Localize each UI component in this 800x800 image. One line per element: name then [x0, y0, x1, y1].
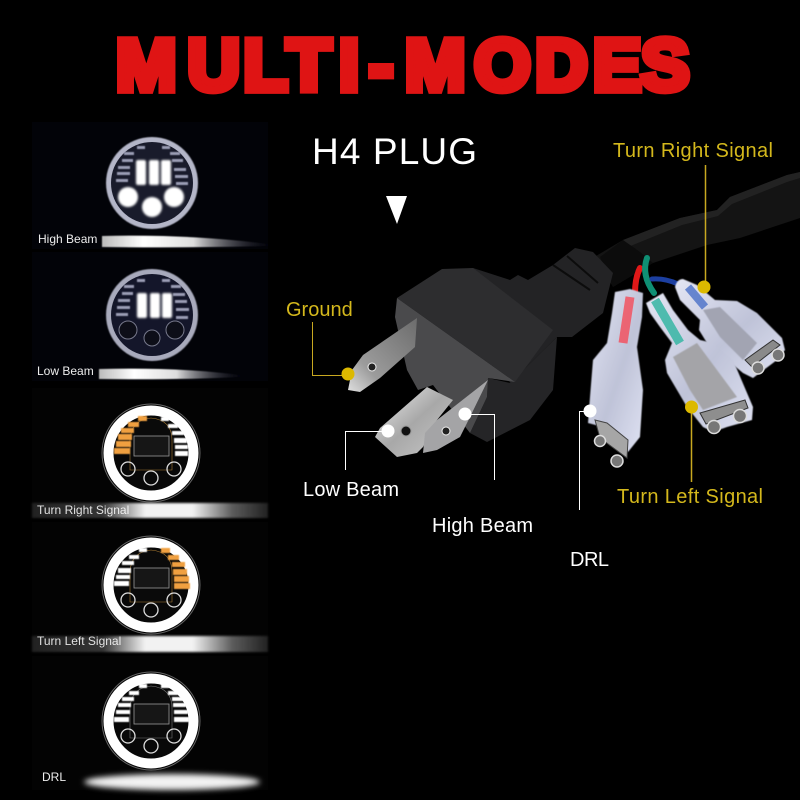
- panel: DRL: [32, 656, 268, 790]
- heading: H4 plug: H4 PLUG: [312, 131, 477, 172]
- panel: low beam: [32, 252, 268, 381]
- callout: high beam: [432, 408, 533, 537]
- light band: [32, 636, 268, 652]
- panel: turn right signal: [32, 388, 268, 518]
- title: MULTI-MODES: [116, 25, 689, 106]
- lamp: [102, 536, 200, 634]
- callout: low beam: Low Beam: [303, 479, 399, 501]
- high beam prong: [423, 380, 488, 453]
- light band: [32, 503, 268, 518]
- connector: turn right (blue): [675, 279, 785, 378]
- label: Turn Right Signal: [37, 503, 129, 517]
- panel: high beam: [32, 122, 268, 249]
- callout: ground: [286, 299, 354, 380]
- arrow: down triangle: [386, 196, 407, 224]
- lamp: [102, 404, 200, 502]
- plug: [348, 248, 613, 457]
- callout: DRL: DRL: [570, 549, 609, 571]
- front face: [395, 298, 515, 433]
- terminal tubes: [594, 436, 623, 467]
- connector: turn left (green): [646, 293, 753, 434]
- callout: turn right signal: [613, 140, 773, 294]
- label: DRL: [42, 770, 66, 784]
- light band: [102, 236, 268, 247]
- callout: turn left signal: [617, 400, 763, 508]
- light band: [99, 369, 240, 379]
- connector: DRL (red): [588, 289, 643, 467]
- top face: [397, 268, 553, 382]
- lamp: [102, 672, 200, 770]
- callout: turn left signal: Turn Left Signal: [617, 486, 763, 508]
- light band: [84, 774, 260, 790]
- lamp: [106, 269, 198, 361]
- terminal tubes: [752, 349, 784, 374]
- neck and strain relief: [473, 248, 613, 383]
- callout: low beam: [303, 424, 399, 501]
- ground prong: [348, 318, 417, 392]
- terminal tubes: [708, 410, 746, 434]
- cable: [596, 172, 800, 287]
- callout: turn right signal: Turn Right Signal: [613, 140, 773, 162]
- low beam prong: [375, 387, 453, 457]
- lamp: [106, 137, 198, 229]
- callout: ground: Ground: [286, 299, 353, 321]
- label: Low Beam: [37, 364, 94, 378]
- lower body: [470, 337, 557, 442]
- label: High Beam: [38, 232, 97, 246]
- callout: DRL: [570, 404, 609, 571]
- panel: turn left signal: [32, 522, 268, 652]
- callout: high beam: High Beam: [432, 515, 533, 537]
- label: Turn Left Signal: [37, 634, 121, 648]
- wires: [635, 258, 678, 293]
